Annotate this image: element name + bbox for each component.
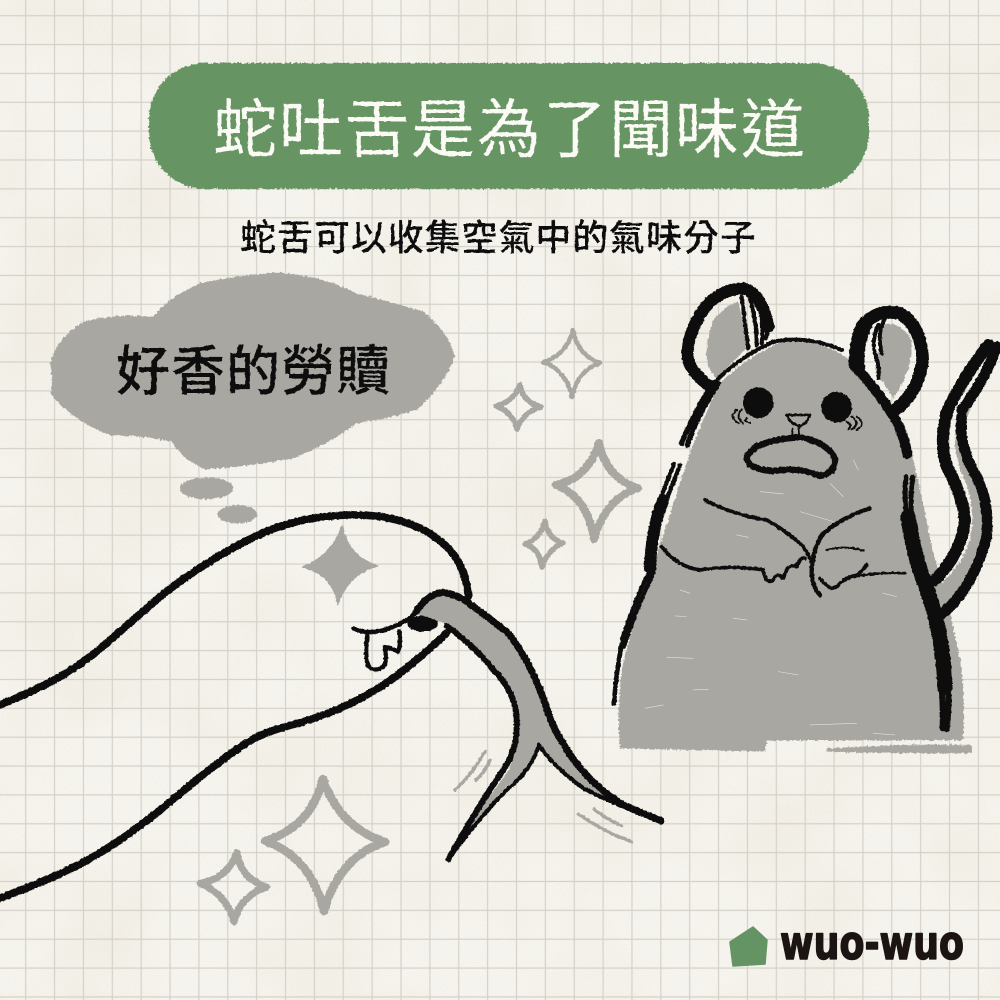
logo	[730, 916, 964, 970]
title banner	[149, 63, 869, 189]
snake mouth line	[353, 613, 415, 632]
subtitle: 蛇舌可以收集空氣中的氣味分子	[240, 217, 756, 258]
large outline sparkle	[265, 779, 385, 911]
left ear	[687, 288, 768, 387]
title text: 蛇吐舌是為了聞味道	[213, 94, 805, 166]
rat scratches	[645, 460, 897, 735]
nose	[787, 415, 810, 426]
head outline	[682, 383, 718, 445]
mouth	[747, 437, 835, 476]
rat grey fills	[619, 302, 997, 753]
body right outline	[905, 477, 913, 520]
motion lines	[455, 752, 632, 842]
lashes	[733, 409, 862, 430]
filled sparkle	[302, 525, 378, 605]
snake mouth opening	[407, 616, 438, 632]
icon: house	[730, 927, 767, 966]
snake tongue	[416, 593, 661, 859]
drool	[366, 632, 400, 669]
rat	[614, 288, 997, 753]
body left outline	[658, 464, 680, 507]
eyes	[743, 387, 774, 418]
rat ink lines	[614, 288, 997, 729]
small outline sparkle	[200, 853, 267, 922]
snake body	[0, 515, 468, 898]
tail	[935, 345, 988, 580]
arms and paws	[705, 500, 812, 563]
sparkles around rat	[496, 330, 638, 567]
right ear	[855, 312, 923, 410]
bubble text: 好香的勞贖	[116, 342, 390, 402]
thought bubble	[50, 273, 455, 523]
sparkles near snake	[200, 525, 385, 922]
snake upper outline	[0, 515, 468, 705]
snake lower outline	[0, 633, 447, 898]
